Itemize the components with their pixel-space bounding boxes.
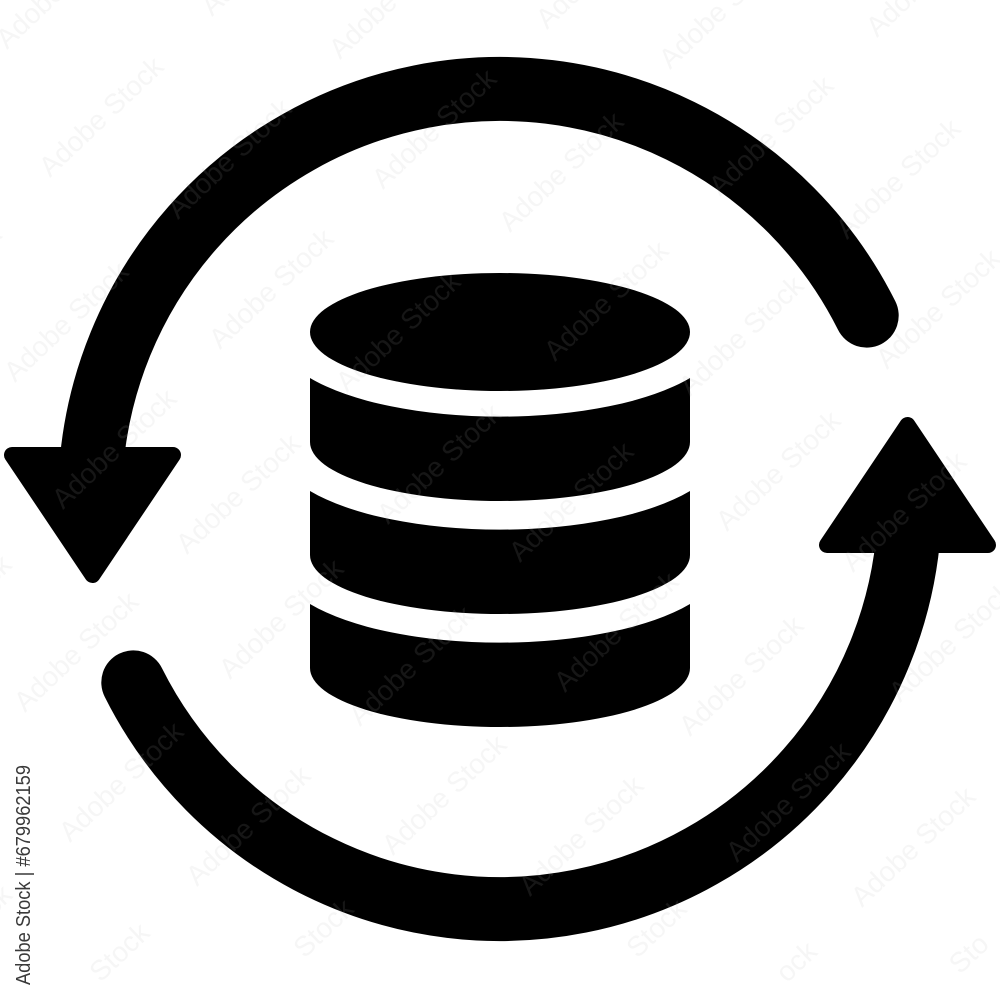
watermark: repeated Adobe Stock text: Adobe Stock	[673, 269, 810, 401]
watermark: repeated Adobe Stock text: Adobe Stock	[548, 565, 685, 697]
watermark: repeated Adobe Stock text: Adobe Stock	[720, 735, 857, 867]
watermark: repeated Adobe Stock text: ock	[770, 935, 823, 988]
watermark: repeated Adobe Stock text: Stock	[83, 916, 156, 987]
watermark: repeated Adobe Stock text: Adobe Stock	[203, 222, 340, 354]
watermark: repeated Adobe Stock text: Adobe Stock	[703, 69, 840, 201]
watermark: repeated Adobe Stock text: Adobe Stock	[513, 769, 650, 901]
watermark: repeated Adobe Stock text: Adobe Stock	[673, 609, 810, 741]
watermark: repeated Adobe Stock text: Adobe Stock	[46, 382, 183, 514]
database top disk	[310, 273, 690, 391]
icon: database cylinder	[310, 273, 690, 727]
watermark: repeated Adobe Stock text: Stock	[287, 892, 360, 963]
watermark: repeated Adobe Stock text: Adobe Stock	[213, 552, 350, 684]
watermark: repeated Adobe Stock text: Adobe Stock	[845, 780, 982, 912]
watermark: repeated Adobe Stock text: Adobe Stock	[33, 50, 170, 182]
database middle layer	[310, 491, 690, 614]
watermark: repeated Adobe Stock text: Adobe Stock	[836, 445, 973, 577]
watermark: repeated Adobe Stock text: Adobe Stock	[376, 728, 513, 860]
watermark: repeated Adobe Stock text: Adobe Stock	[53, 715, 190, 847]
watermark: repeated Adobe Stock text: Adobe Stock	[343, 599, 480, 731]
watermark: repeated Adobe Stock text: Adobe Stock	[503, 435, 640, 567]
watermark: repeated Adobe Stock text: Sto	[943, 928, 995, 979]
watermark: repeated Adobe Stock text: Adobe Stock	[8, 585, 145, 717]
watermark: repeated Adobe Stock text: Adobe Stock	[366, 62, 503, 194]
database upper layer	[310, 378, 690, 501]
watermark: repeated Adobe Stock text: Adobe Stock	[180, 759, 317, 891]
watermark: repeated Adobe Stock text: Adobe Stock	[710, 404, 847, 536]
stock id text: Adobe Stock | #679962159	[13, 765, 35, 985]
arrow: bottom arc pointing up-right	[133, 425, 988, 909]
watermark: repeated Adobe Stock text: Adobe Stock	[830, 112, 967, 244]
watermark: repeated Adobe Stock text: Stock	[620, 892, 693, 963]
watermark: repeated Adobe Stock text: Adobe Stock	[170, 427, 307, 559]
watermark: repeated Adobe Stock text: Adobe Stock	[161, 92, 298, 224]
watermark: repeated Adobe Stock text: Adobe Stock	[0, 255, 135, 387]
watermark: repeated Adobe Stock text: Adobe Stock	[493, 105, 630, 237]
watermark: repeated Adobe Stock text: Adobe Stock	[330, 265, 467, 397]
arrow: top arc pointing down-left	[12, 89, 867, 575]
watermark: repeated Adobe Stock text: Adobe Stock	[538, 234, 675, 366]
database bottom layer	[310, 604, 690, 727]
watermark: repeated Adobe Stock text: Adobe Stock	[371, 397, 508, 529]
